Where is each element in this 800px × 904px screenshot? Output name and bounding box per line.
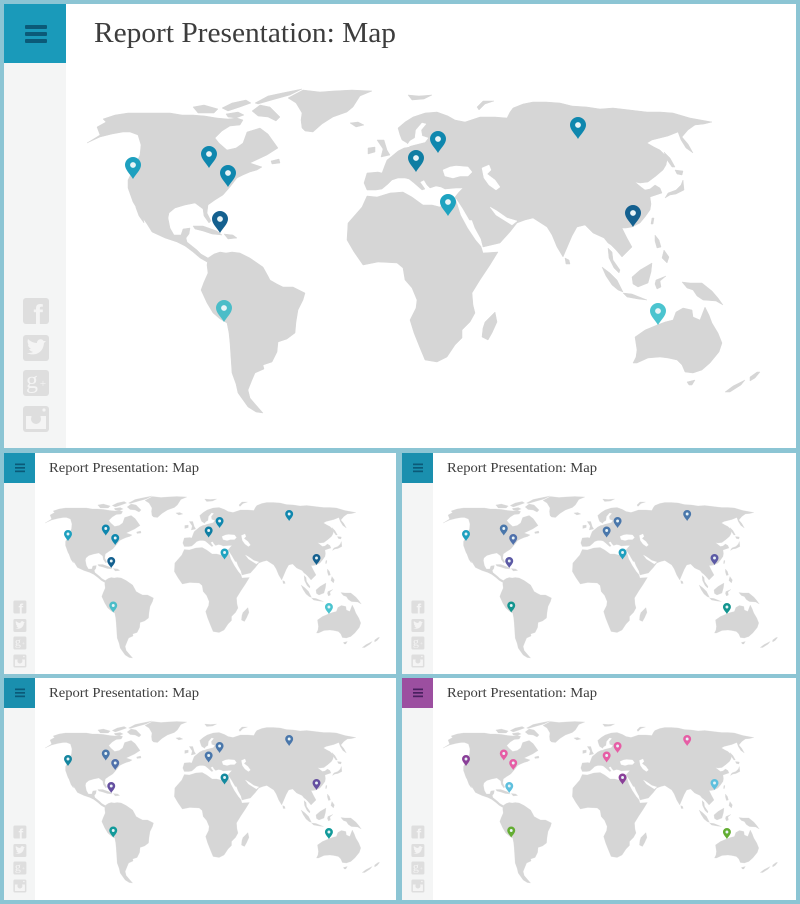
menu button <box>4 453 35 483</box>
world map <box>45 721 380 883</box>
social icons <box>23 298 49 432</box>
social icons <box>411 600 424 668</box>
map pins <box>462 510 731 614</box>
title: Report Presentation: Map <box>447 460 597 475</box>
world map <box>443 496 778 658</box>
menu button <box>4 678 35 708</box>
title: Report Presentation: Map <box>447 685 597 700</box>
map pins <box>125 117 666 325</box>
title: Report Presentation: Map <box>49 685 199 700</box>
map pins <box>64 735 333 839</box>
sidebar <box>4 63 66 448</box>
panel: indigo variant <box>402 453 796 674</box>
menu button <box>402 453 433 483</box>
world map <box>87 89 760 413</box>
panel: blue variant <box>4 453 396 674</box>
social icons <box>13 826 26 892</box>
title: Report Presentation: Map <box>49 460 199 475</box>
title: Report Presentation: Map <box>94 18 396 49</box>
social icons <box>13 600 26 668</box>
menu button <box>4 4 66 63</box>
panel: teal and violet variant <box>4 678 396 900</box>
world map <box>45 496 380 658</box>
map pins <box>462 735 731 839</box>
social icons <box>411 826 424 892</box>
panel: purple and pink variant <box>402 678 796 900</box>
panel: main map slide <box>4 4 796 448</box>
menu button <box>402 678 433 708</box>
world map <box>443 721 778 883</box>
map pins <box>64 510 333 614</box>
